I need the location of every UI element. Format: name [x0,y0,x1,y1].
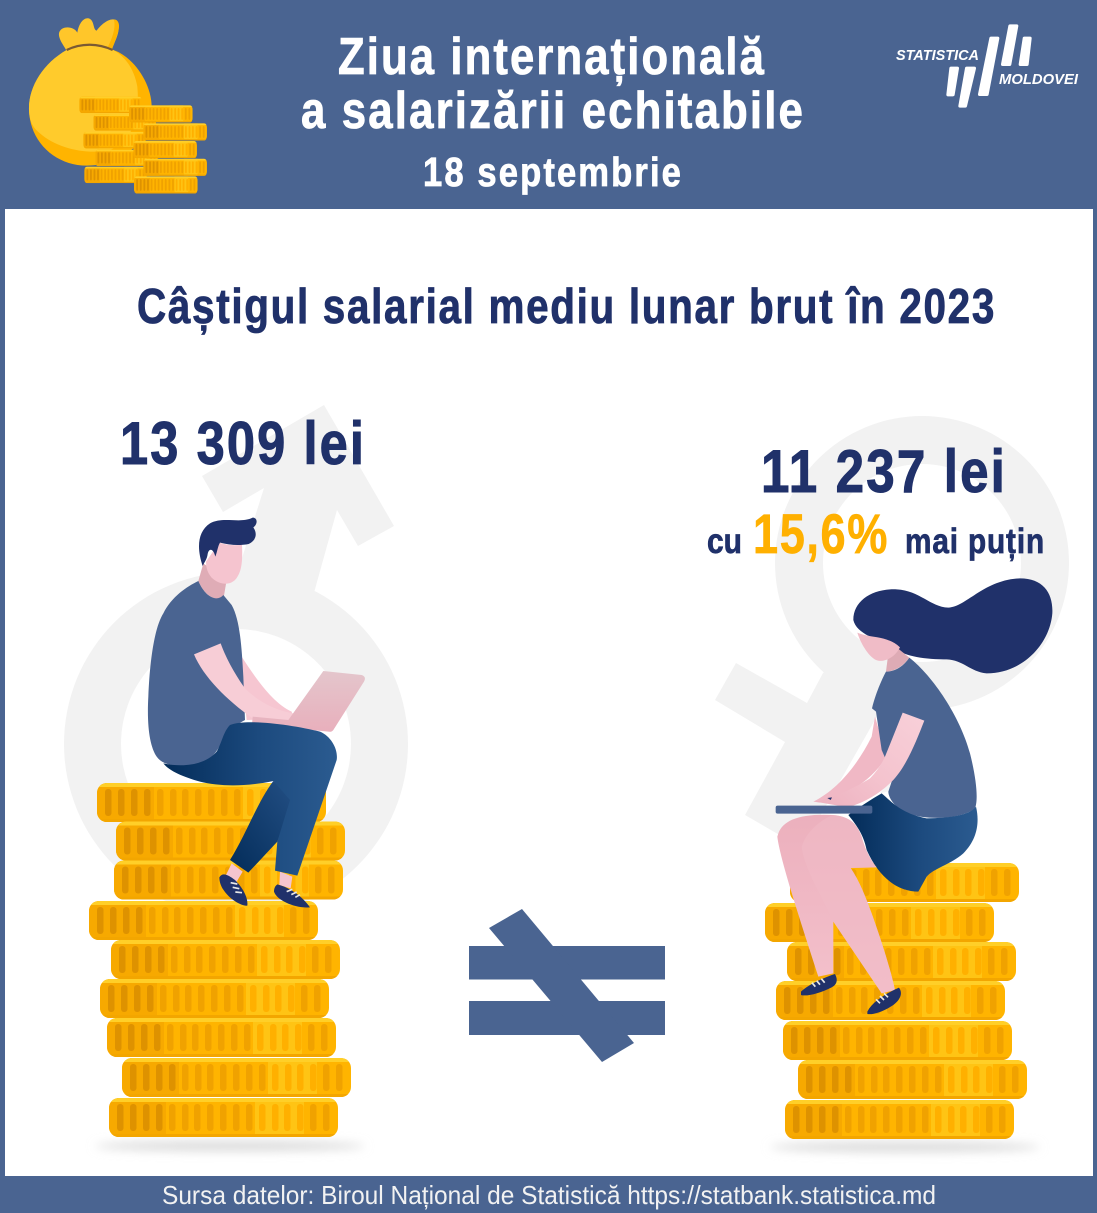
icon: female symbol background [715,416,1069,848]
female salary value: 11 237 lei [761,438,1007,505]
woman: hand detail [827,797,832,800]
callout: difference: 15,6% [753,502,889,565]
man: far leg [230,781,293,873]
title: a salarizării echitabile [301,82,805,140]
man: neck [198,563,227,599]
woman: face [857,633,900,661]
title [301,28,805,195]
left coin stack [89,783,351,1137]
woman: back arm [813,717,887,803]
man: laptop [252,671,365,732]
male salary value: 13 309 lei [120,410,366,477]
title: Ziua internațională [338,28,766,86]
callout: difference: mai puțin [905,522,1045,561]
icon: money bag with coins [29,18,207,193]
man: face [206,543,242,584]
icon: not equal sign [469,909,665,1062]
woman: shirt [872,658,977,818]
man: hair [199,518,257,566]
shadow under right stack [770,1142,1040,1152]
woman: front arm [815,713,924,807]
woman: skirt [848,793,978,892]
woman: tablet [776,806,872,814]
man: back arm [242,657,293,720]
woman: shoes [801,974,901,1014]
callout: difference [707,502,1045,565]
source footer: Sursa datelor: Biroul Național de Statistică https://statbank.statistica.md [162,1180,936,1210]
woman: legs [777,815,895,993]
logo: Statistica Moldovei: MOLDOVEI [999,72,1079,88]
man: shoe laces [231,883,300,897]
man: trousers [163,722,337,876]
icon: male symbol background [64,405,408,916]
illustration: woman with tablet [776,578,1052,1014]
logo: Statistica Moldovei: STATISTICA [896,48,979,64]
woman: hair [853,578,1052,673]
woman: near leg shade [802,815,895,993]
woman: shoe laces [812,979,888,1003]
man: front arm [194,643,293,725]
right coin stack [765,863,1027,1139]
man: shoes [219,874,310,908]
callout: difference: cu [707,522,742,561]
title: 18 septembrie [423,149,683,195]
woman: white patch behind arm [880,778,893,793]
woman: neck [886,647,909,672]
illustration: man with laptop [148,518,365,908]
logo: Statistica Moldovei [896,26,1079,106]
man: ankles [226,863,292,888]
man: shirt [148,581,245,766]
shadow under left stack [95,1141,365,1151]
